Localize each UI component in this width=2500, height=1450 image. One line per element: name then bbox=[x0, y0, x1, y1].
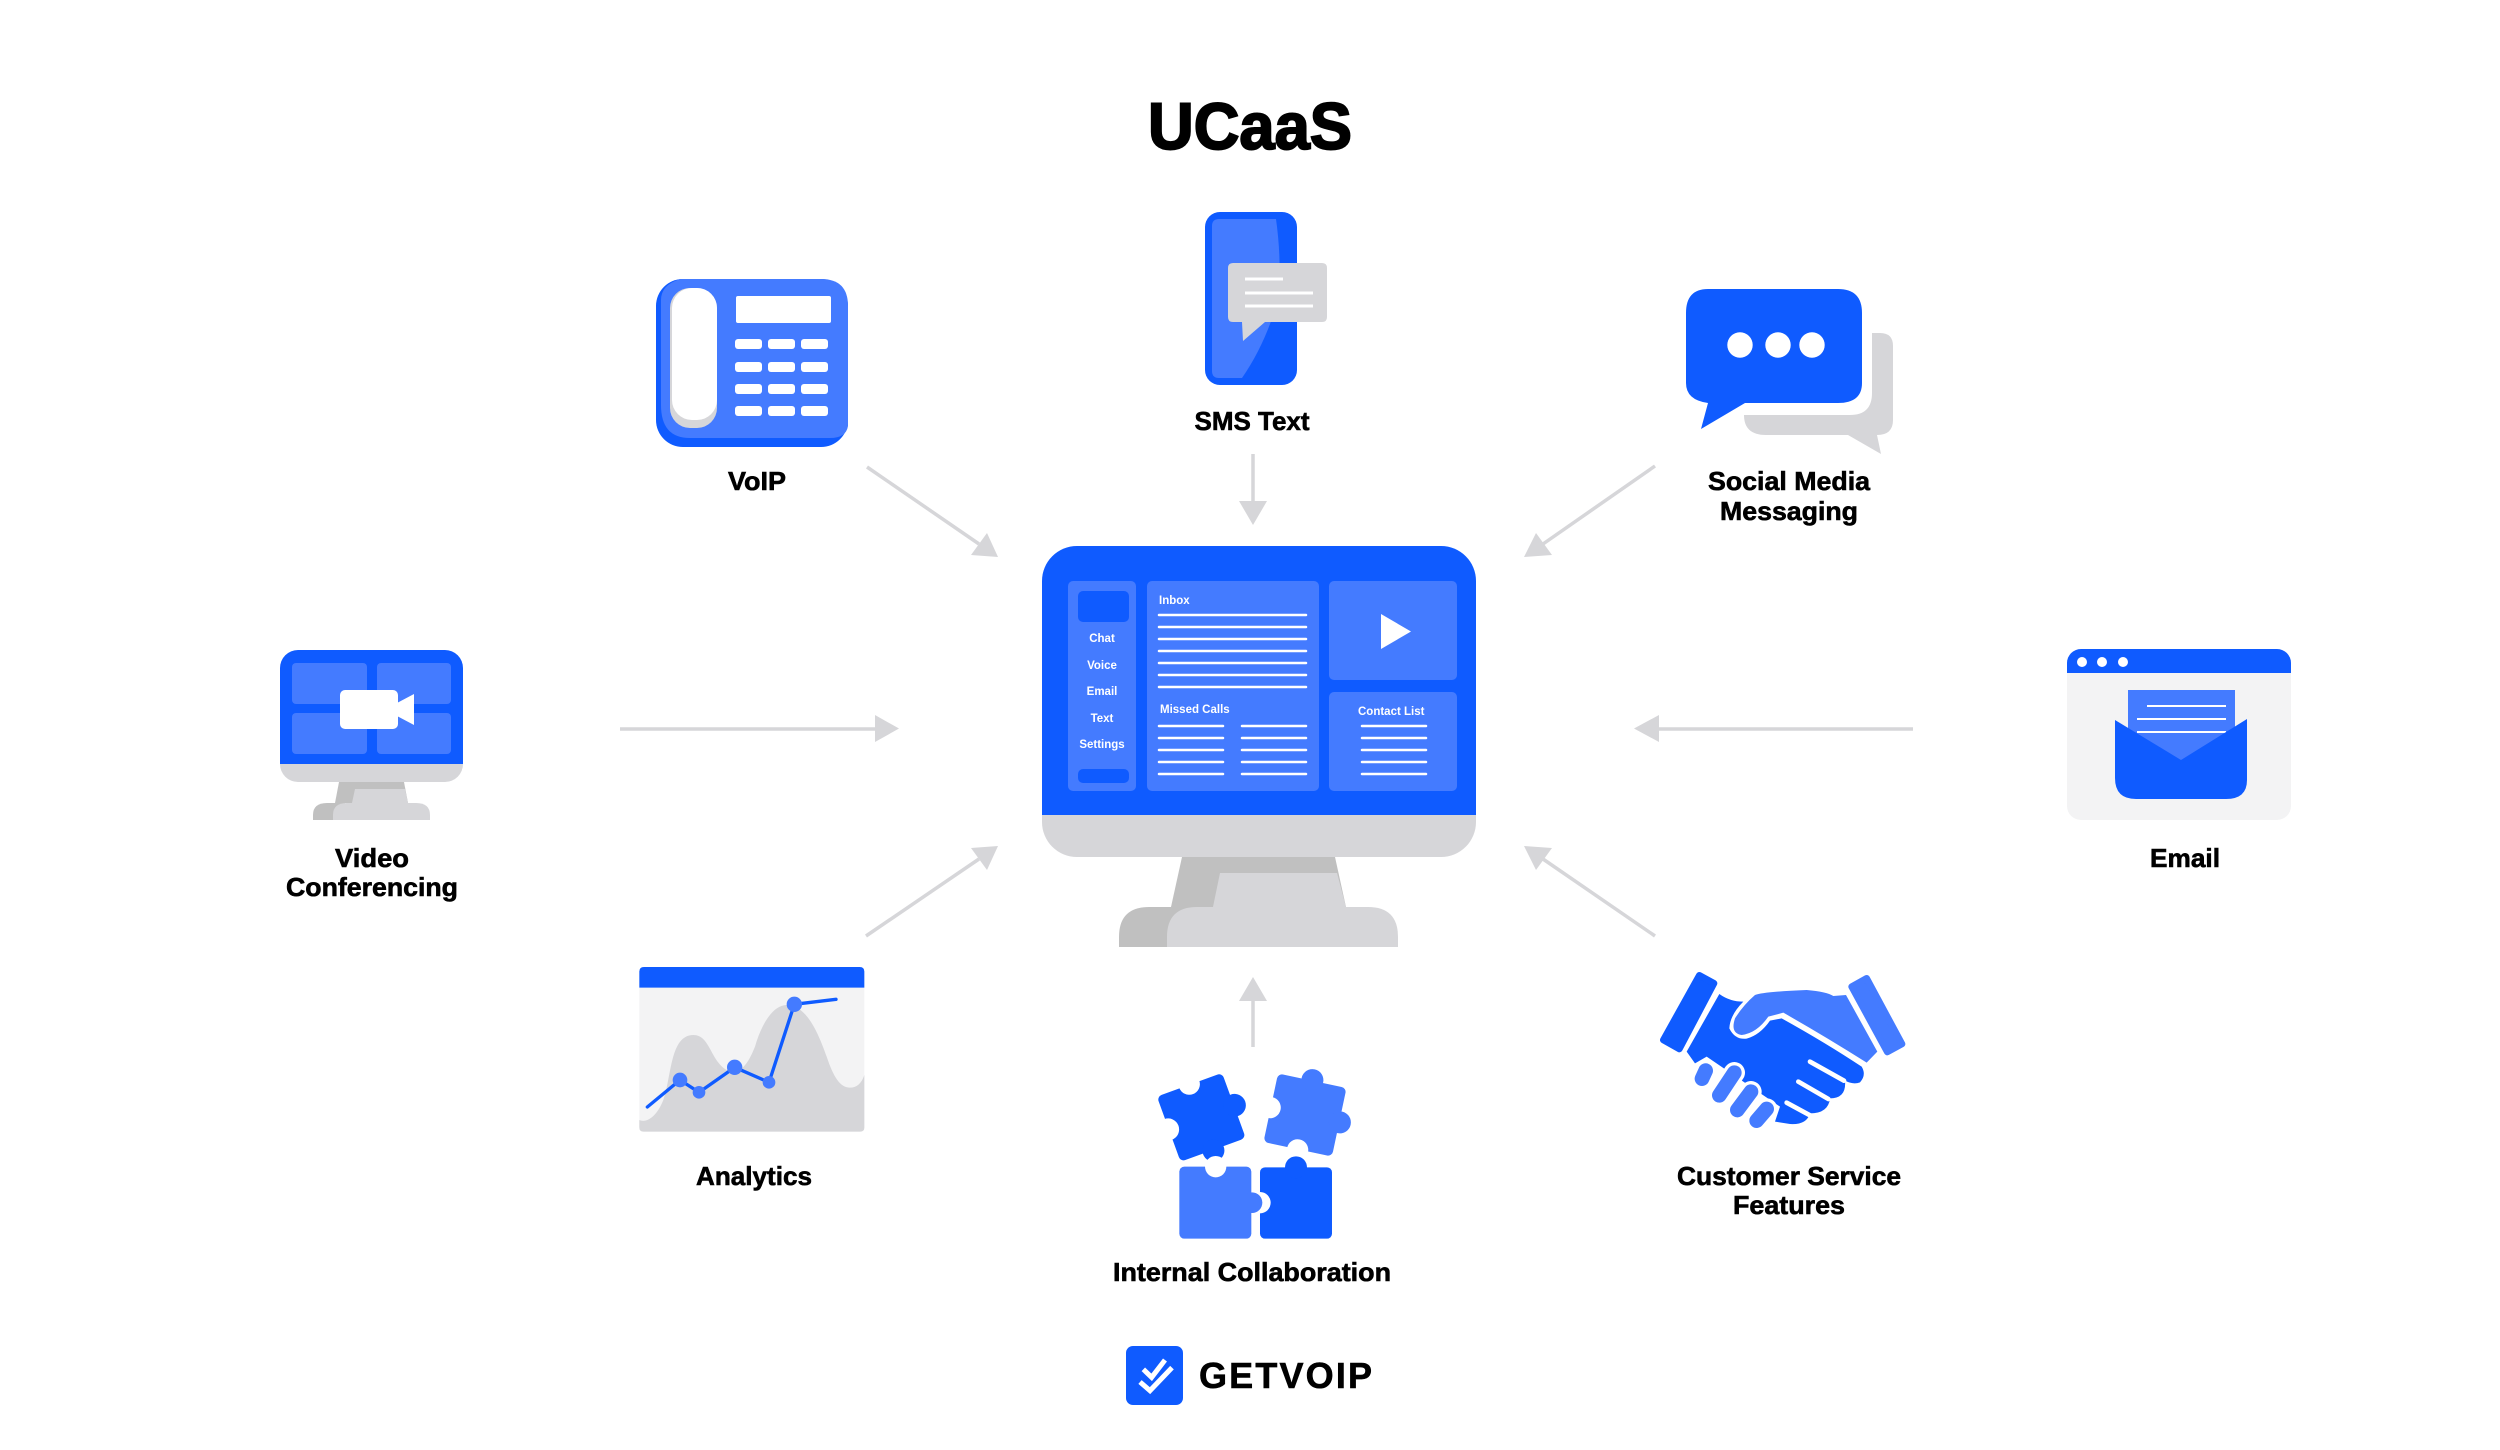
sidebar menu: Settings bbox=[1079, 739, 1125, 751]
label: Social Media Messaging: Social Media bbox=[1708, 466, 1871, 496]
arrow: SMS to monitor bbox=[1239, 454, 1267, 525]
arrow: analytics to monitor bbox=[866, 846, 998, 936]
icon: social media chat bubbles bbox=[1686, 289, 1893, 454]
label: Video Conferencing: Video bbox=[335, 843, 409, 873]
label: Customer Service Features bbox=[1677, 1161, 1901, 1220]
sidebar menu: Chat bbox=[1089, 633, 1115, 645]
label: Internal Collaboration: Internal Collaboration bbox=[1113, 1257, 1391, 1287]
hand: right bbox=[1733, 990, 1877, 1063]
video panel bbox=[1329, 581, 1457, 680]
logo wordmark: GETVOIP bbox=[1199, 1355, 1372, 1396]
logo mark bbox=[1126, 1346, 1183, 1405]
puzzle piece: top left bbox=[1142, 1058, 1261, 1177]
icon: smartphone with SMS bubble bbox=[1205, 212, 1327, 385]
cuff: right bbox=[1852, 978, 1902, 1052]
arrow: email to monitor bbox=[1634, 715, 1913, 742]
label: Video Conferencing: Conferencing bbox=[286, 872, 458, 902]
inbox and missed calls panel bbox=[1147, 581, 1319, 791]
sidebar menu bbox=[1068, 581, 1136, 791]
arrow: social media to monitor bbox=[1524, 466, 1655, 557]
arrow: video conferencing to monitor bbox=[620, 715, 899, 742]
contact list panel: Contact List bbox=[1358, 706, 1425, 718]
arrow: VoIP to monitor bbox=[867, 467, 998, 557]
icon: analytics chart window bbox=[639, 967, 864, 1132]
label: Customer Service Features: Features bbox=[1733, 1190, 1845, 1220]
inbox and missed calls panel: Inbox bbox=[1159, 595, 1190, 607]
title: UCaaS bbox=[1148, 89, 1352, 163]
monitor bezel bbox=[1042, 815, 1476, 857]
icon: email window with envelope bbox=[2067, 649, 2291, 820]
central monitor bbox=[1042, 546, 1476, 947]
cuff: left bbox=[1663, 975, 1714, 1049]
sidebar menu: Email bbox=[1087, 686, 1117, 698]
puzzle piece: bottom left bbox=[1179, 1156, 1262, 1239]
puzzle piece: top right bbox=[1250, 1060, 1360, 1170]
icon: puzzle pieces bbox=[1142, 1058, 1360, 1239]
label: Social Media Messaging: Messaging bbox=[1720, 496, 1858, 526]
label: Social Media Messaging bbox=[1708, 466, 1871, 526]
icon: video conferencing monitor bbox=[280, 650, 463, 820]
fingers bbox=[1702, 1071, 1767, 1121]
label: Customer Service Features: Customer Service bbox=[1677, 1161, 1901, 1191]
puzzle piece: bottom right bbox=[1249, 1156, 1332, 1239]
label: VoIP: VoIP bbox=[728, 466, 786, 496]
logo: GetVoIP bbox=[1126, 1346, 1372, 1405]
label: Analytics: Analytics bbox=[696, 1161, 812, 1191]
hand: left bbox=[1687, 994, 1864, 1124]
label: Email: Email bbox=[2150, 843, 2220, 873]
contact list panel bbox=[1329, 692, 1457, 791]
sidebar menu: Voice bbox=[1087, 660, 1117, 672]
label: SMS Text: SMS Text bbox=[1194, 406, 1310, 436]
label: Video Conferencing bbox=[286, 843, 458, 902]
icon: handshake bbox=[1663, 975, 1902, 1124]
icon: desk phone bbox=[656, 279, 848, 447]
inbox and missed calls panel: Missed Calls bbox=[1160, 704, 1230, 716]
sidebar menu: Text bbox=[1091, 713, 1114, 725]
monitor stand bbox=[1119, 857, 1398, 947]
monitor screen bbox=[1042, 546, 1476, 815]
arrow: internal collaboration to monitor bbox=[1239, 977, 1267, 1047]
arrow: customer service to monitor bbox=[1524, 846, 1655, 936]
